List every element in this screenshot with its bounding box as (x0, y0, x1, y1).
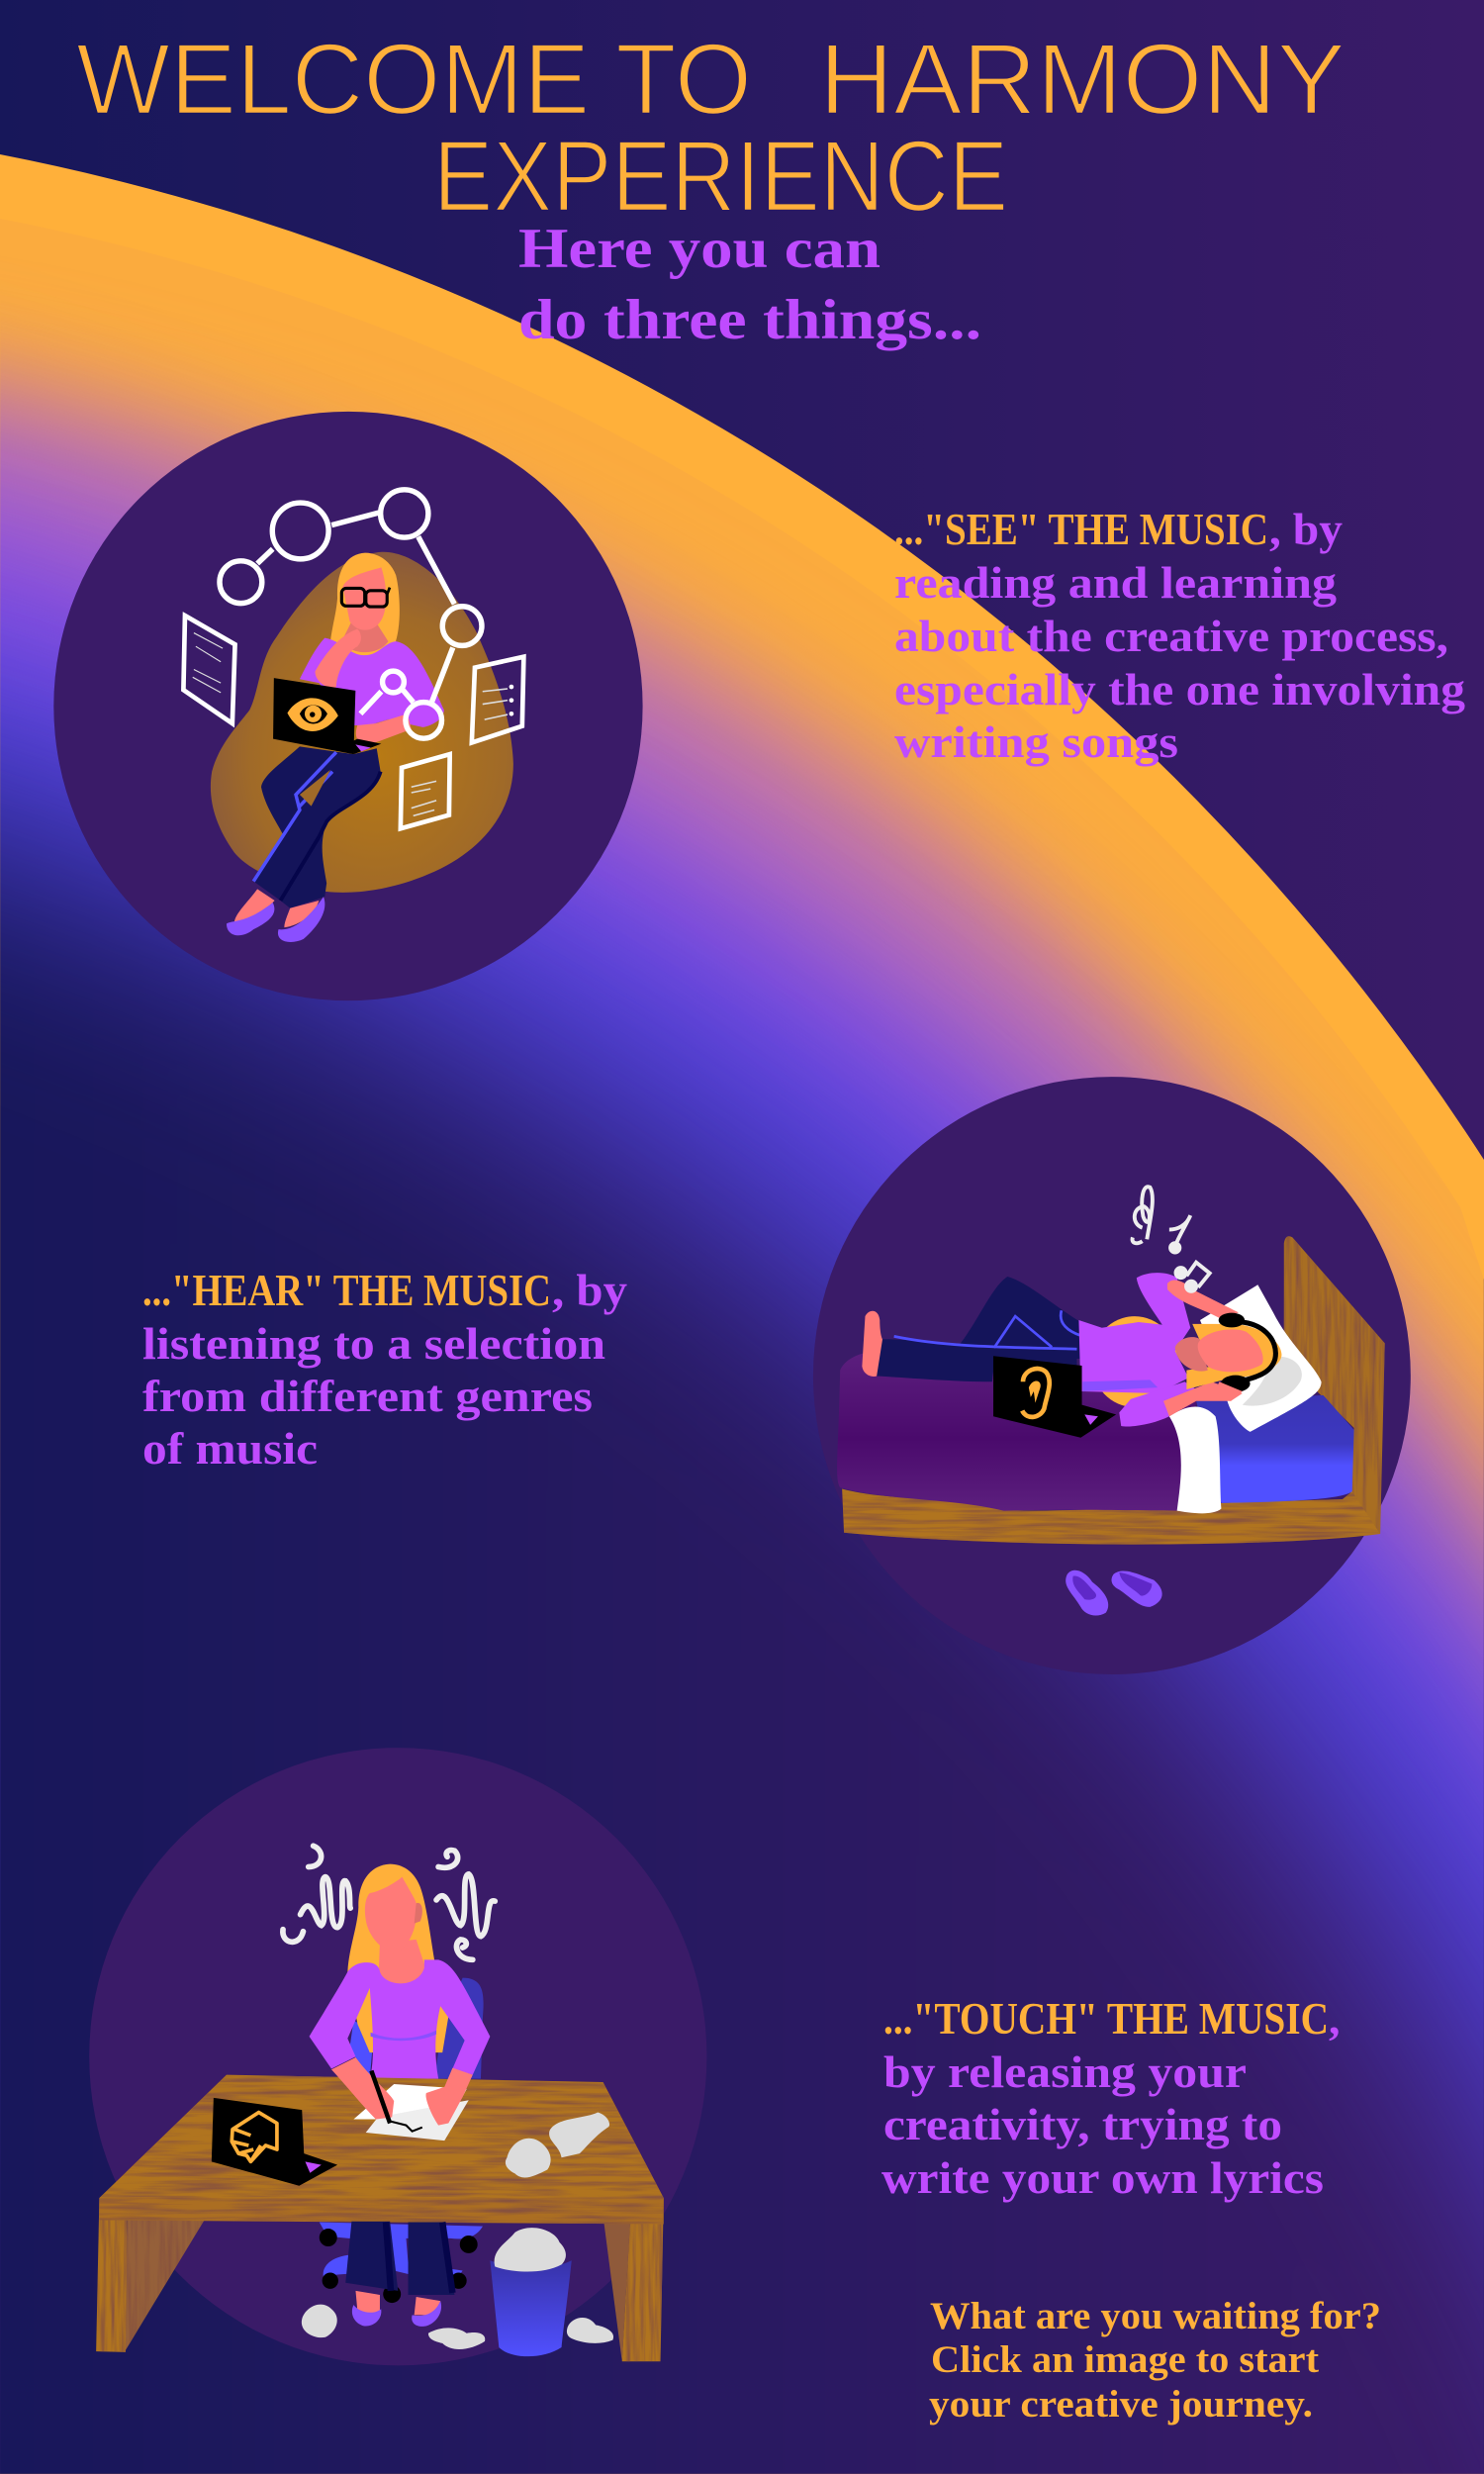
text block: see the music: especially the one involving (894, 664, 1465, 714)
title (76, 23, 1345, 233)
subtitle: Here you can (518, 218, 881, 280)
title: WELCOME TO (76, 23, 752, 136)
call to action: What are you waiting for? (930, 2295, 1381, 2337)
woman lying with headphones (862, 1273, 1281, 1427)
text block: see the music: reading and learning (894, 557, 1337, 608)
music notes (1133, 1187, 1210, 1291)
thought squiggles (283, 1846, 495, 1959)
laptop with hand icon (212, 2098, 337, 2186)
text block: hear the music: listening to a selection (142, 1318, 605, 1369)
panel: see illustration (53, 412, 643, 1000)
text block: hear the music: of music (142, 1423, 318, 1474)
text block: touch the music: ..."TOUCH" THE MUSIC (883, 1993, 1329, 2044)
subtitle (518, 218, 981, 351)
text block: see the music: ..."SEE" THE MUSIC (894, 504, 1268, 554)
text block: touch the music: by releasing your (883, 2046, 1247, 2097)
call to action: your creative journey. (929, 2383, 1313, 2426)
network of circles (220, 490, 482, 738)
slippers (1066, 1570, 1162, 1616)
trousers and shoes (345, 2222, 454, 2327)
crumpled papers on desk (506, 2113, 609, 2177)
woman reading (227, 553, 444, 942)
woman writing (310, 1864, 490, 2079)
text block: hear the music: , by (552, 1265, 627, 1315)
crumpled papers on floor (302, 2305, 613, 2349)
wastebasket with paper (490, 2228, 572, 2356)
panel: hear illustration (813, 1077, 1411, 1674)
document bottom (401, 754, 450, 828)
panel: touch illustration (89, 1748, 706, 2365)
title: HARMONY (819, 23, 1345, 136)
circle backdrop hear (813, 1077, 1411, 1674)
document left (183, 616, 235, 723)
text block: hear the music (142, 1265, 627, 1474)
call to action: Click an image to start (931, 2338, 1319, 2381)
text block: touch the music: write your own lyrics (881, 2152, 1324, 2203)
text block: touch the music: creativity, trying to (883, 2099, 1282, 2149)
document right (472, 657, 523, 742)
circle backdrop see (53, 412, 643, 1000)
text block: see the music (894, 504, 1465, 767)
desk chair (320, 1978, 484, 2303)
text block: see the music: about the creative process, (894, 611, 1448, 661)
bed (837, 1236, 1385, 1545)
laptop with eye icon (273, 678, 381, 754)
call to action (929, 2295, 1381, 2426)
text block: touch the music (881, 1993, 1340, 2203)
papers and hands (331, 2057, 473, 2141)
laptop with ear icon (993, 1356, 1116, 1438)
text block: see the music: writing songs (894, 716, 1178, 767)
title: EXPERIENCE (433, 120, 1008, 233)
text block: hear the music: ..."HEAR" THE MUSIC (142, 1265, 551, 1315)
text block: hear the music: from different genres (142, 1371, 593, 1421)
subtitle: do three things... (518, 289, 981, 351)
text block: see the music: , by (1269, 504, 1343, 554)
circle backdrop touch (89, 1748, 706, 2365)
desk (96, 2075, 664, 2361)
beanbag (211, 552, 513, 893)
text block: touch the music: , (1329, 1993, 1340, 2044)
